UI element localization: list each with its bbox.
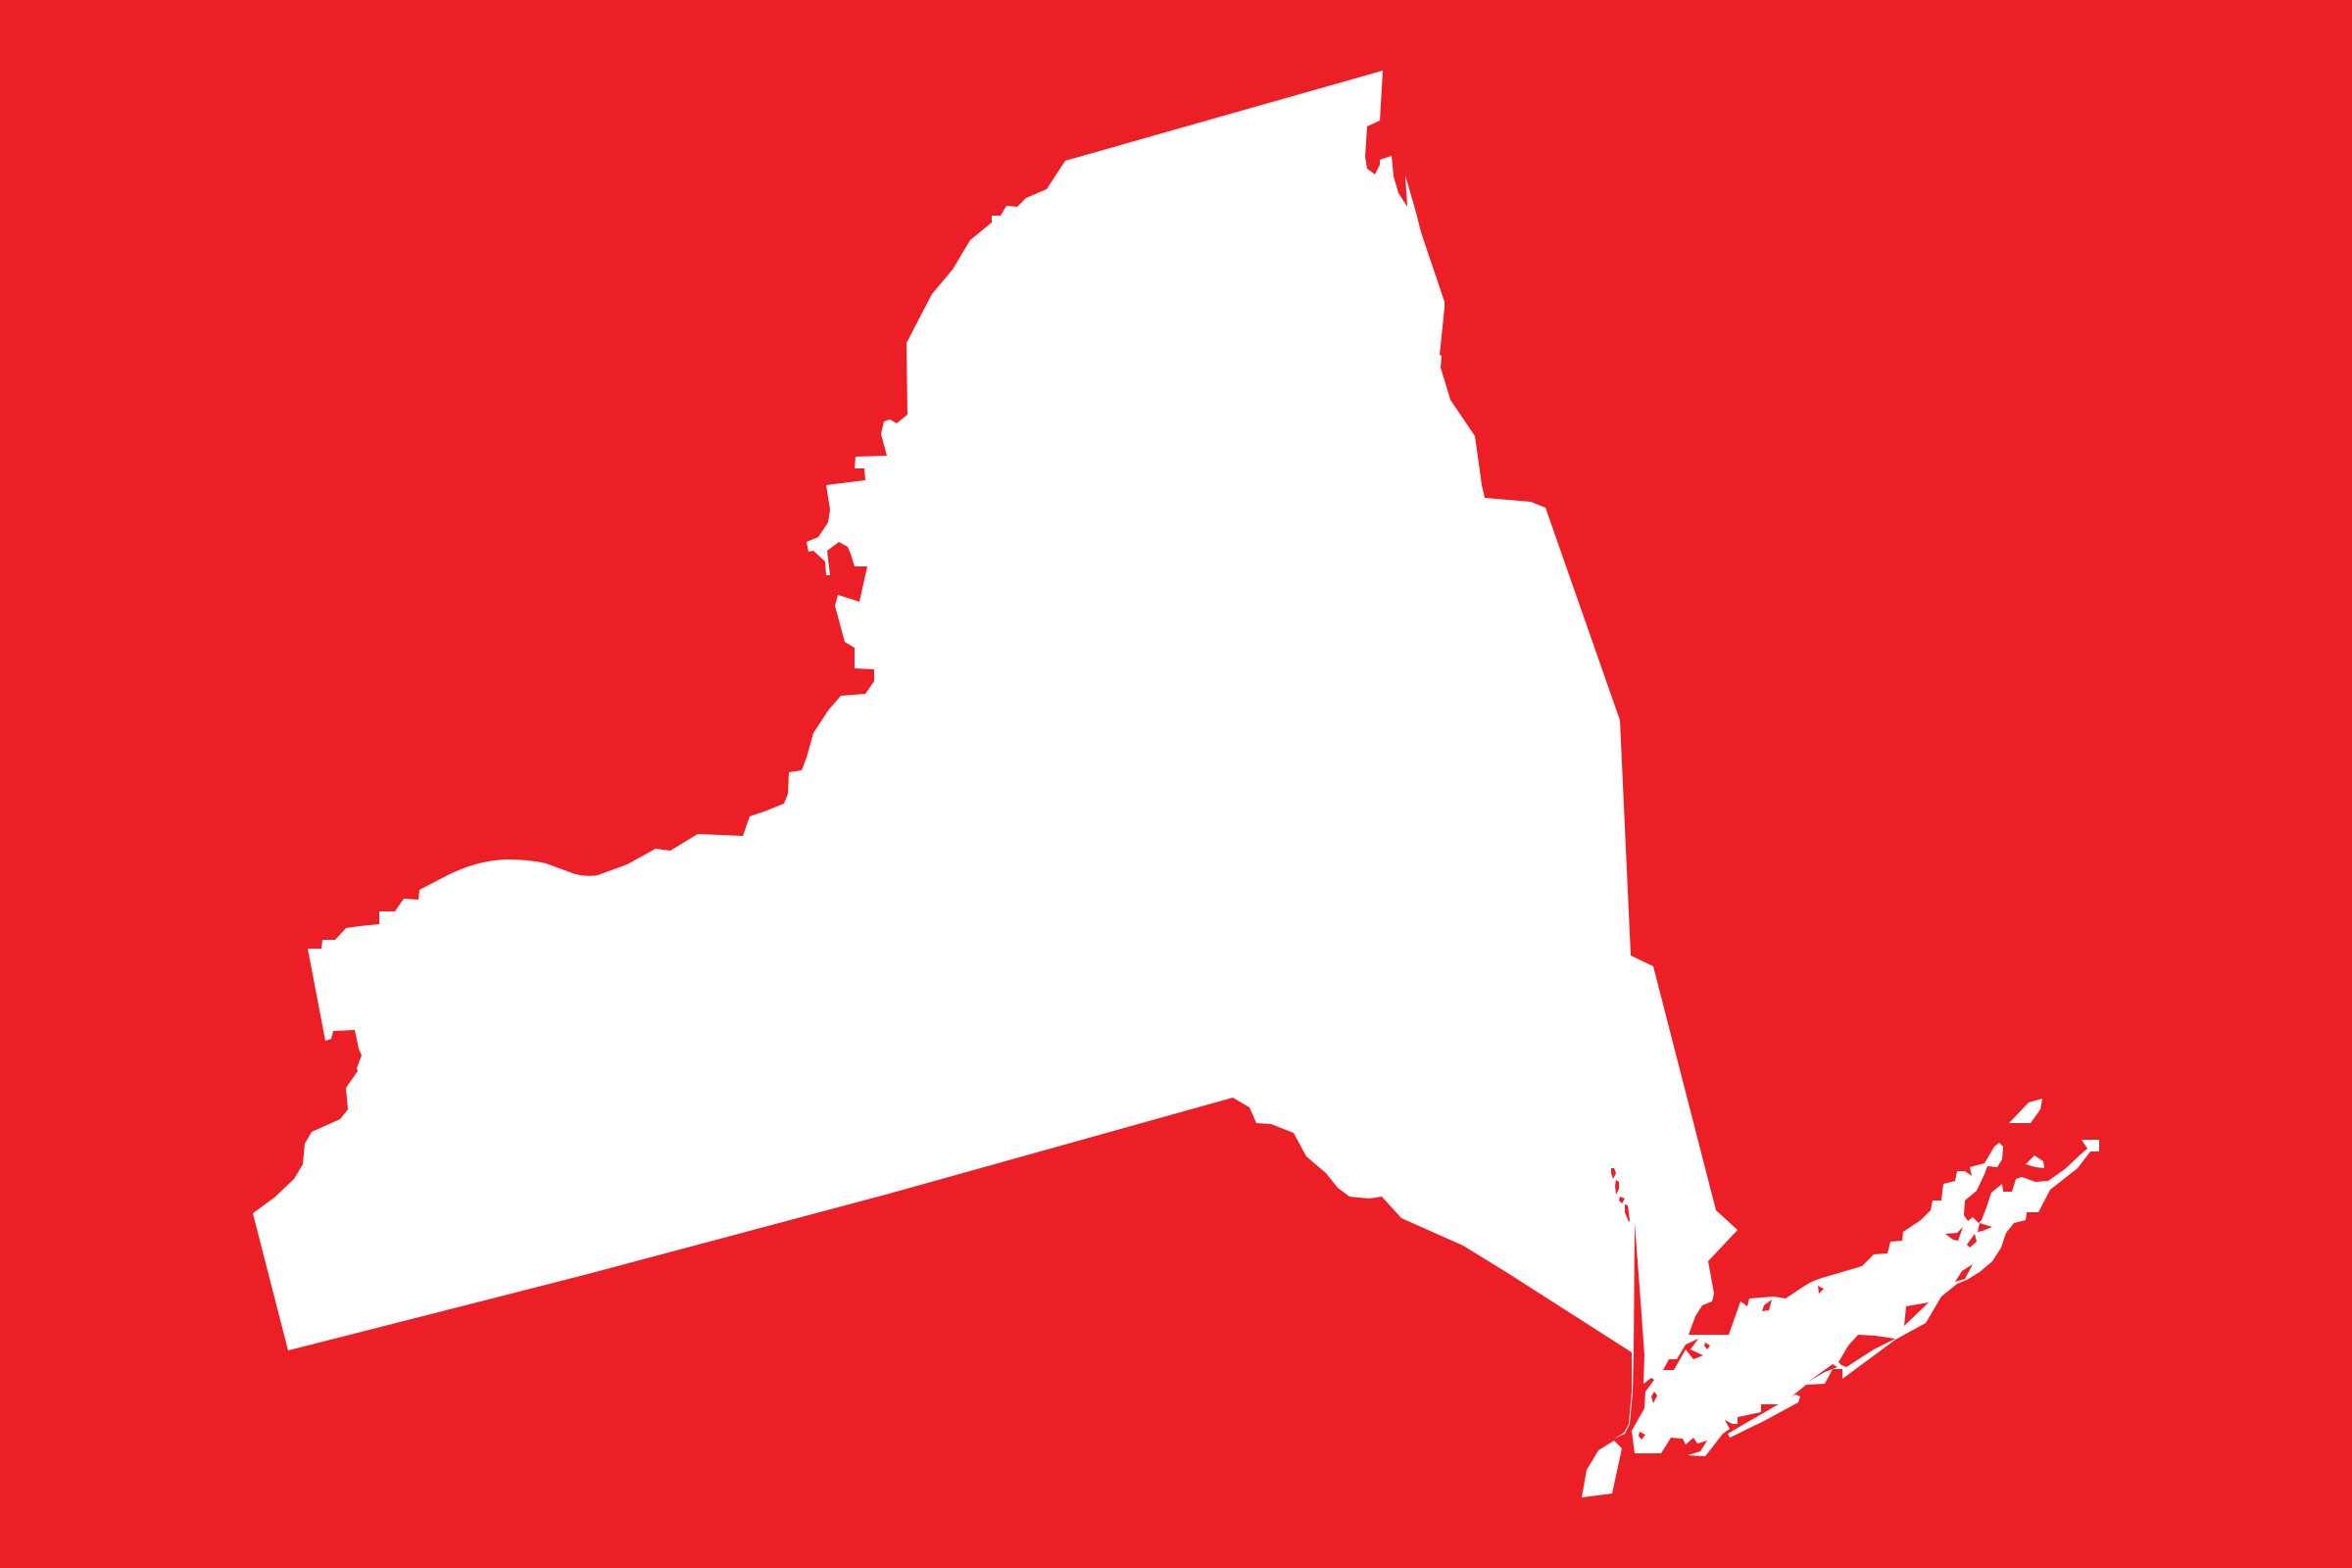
- barrier beach: [1728, 1395, 1800, 1438]
- Staten Island: [1582, 1441, 1622, 1497]
- Gardiners Island: [2026, 1155, 2044, 1168]
- map: New York State silhouette: [253, 71, 2099, 1497]
- state mainland and Long Island outline: [253, 71, 2099, 1456]
- inland water holes: [1611, 1168, 1992, 1440]
- Plum Island: [2009, 1099, 2042, 1123]
